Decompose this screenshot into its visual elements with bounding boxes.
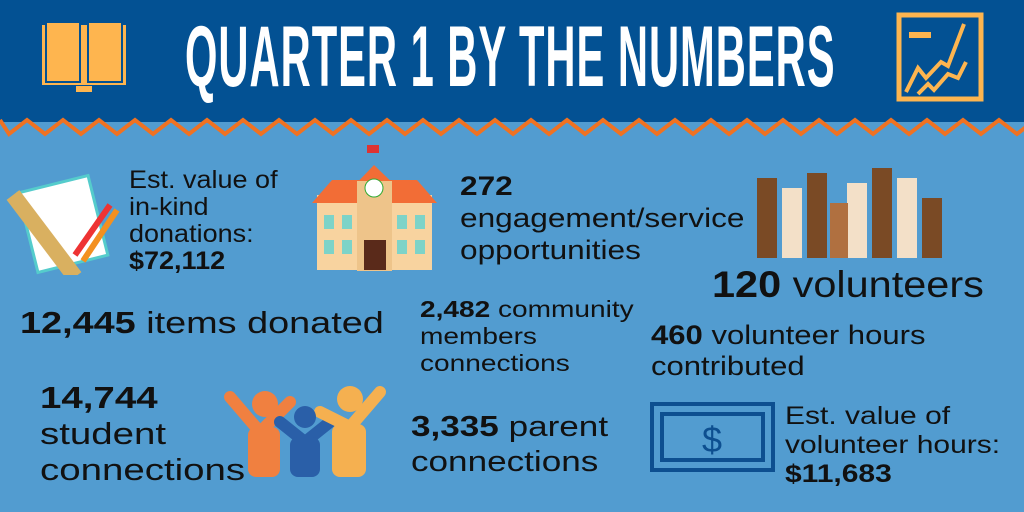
text: engagement opportunities xyxy=(460,171,744,265)
title: QUARTER 1 BY THE NUMBERS xyxy=(185,9,836,105)
text: in-kind value xyxy=(129,166,278,275)
icon: dollar bill: $ xyxy=(702,419,722,460)
text: volunteers: 120 volunteers xyxy=(712,264,984,305)
text: student connections xyxy=(40,380,245,487)
text: engagement opportunities: engagement/service xyxy=(460,203,744,233)
text: in-kind value: $72,112 xyxy=(129,247,225,275)
header band xyxy=(0,0,1024,122)
icon: raised hands xyxy=(757,168,942,258)
text: parent connections: 3,335 parent xyxy=(411,411,608,443)
text: student connections: connections xyxy=(40,452,245,487)
icon: dollar bill xyxy=(650,402,775,472)
text: community members: connections xyxy=(420,350,570,376)
text: volunteer value xyxy=(785,402,1000,488)
text: engagement opportunities: opportunities xyxy=(460,235,641,265)
icon: book xyxy=(42,23,126,92)
text: volunteer hours: contributed xyxy=(651,351,805,381)
text: engagement opportunities: 272 xyxy=(460,171,513,201)
text: in-kind value: in-kind xyxy=(129,193,209,221)
zigzag border xyxy=(0,118,1024,137)
text: community members: 2,482 community xyxy=(420,296,634,322)
icon: school xyxy=(312,145,437,271)
icon: chart xyxy=(896,12,984,102)
icon: notebook and pencils xyxy=(6,174,120,275)
text: volunteer value: Est. value of xyxy=(785,402,950,430)
text: parent connections: connections xyxy=(411,446,598,478)
text: items donated: 12,445 items donated xyxy=(20,305,384,340)
text: parent connections xyxy=(411,411,608,478)
text: volunteer value: $11,683 xyxy=(785,460,892,488)
icon: people cheering xyxy=(224,386,386,477)
text: volunteer hours: 460 volunteer hours xyxy=(651,320,925,350)
text: in-kind value: Est. value of xyxy=(129,166,278,194)
text: student connections: student xyxy=(40,416,166,451)
text: community members: members xyxy=(420,323,537,349)
text: in-kind value: donations: xyxy=(129,220,254,248)
text: volunteer hours xyxy=(651,320,925,381)
text: student connections: 14,744 xyxy=(40,380,158,415)
text: community members xyxy=(420,296,634,376)
text: volunteer value: volunteer hours: xyxy=(785,431,1000,459)
